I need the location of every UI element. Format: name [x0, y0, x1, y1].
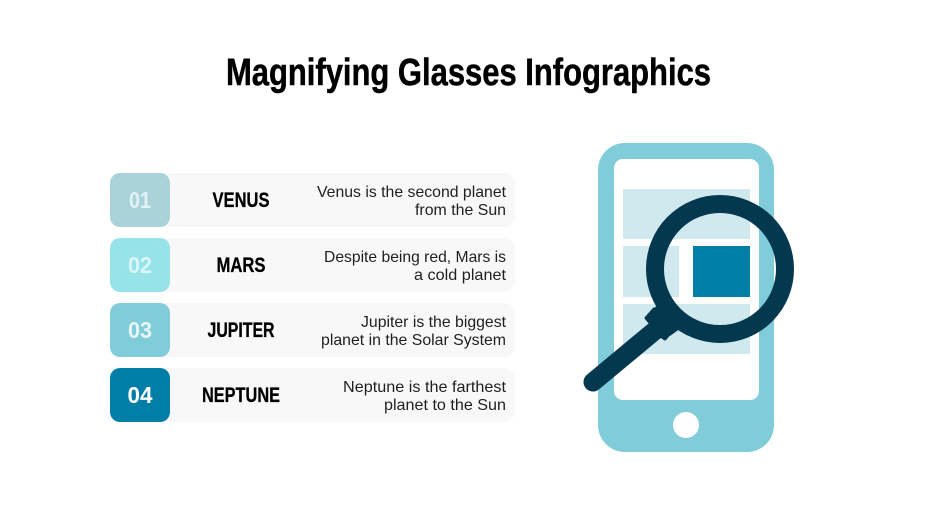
icon: smartphone: [598, 143, 774, 452]
row: Jupiter: Jupiter is the biggest: [361, 314, 507, 331]
row: Mars: 02: [128, 252, 152, 278]
row: Neptune: Neptune is the farthest: [343, 379, 507, 396]
row: Venus: Venus is the second planet: [317, 184, 507, 201]
icon: magnifying glass: [593, 204, 785, 382]
row: Mars: MARS: [216, 254, 266, 277]
row: Neptune: planet to the Sun: [384, 397, 506, 414]
panel: list of planets: [110, 173, 515, 422]
row: Venus: 01: [129, 187, 151, 213]
row: Neptune: [110, 368, 515, 422]
row: Neptune: 04: [128, 382, 153, 408]
row: Mars: [110, 238, 515, 292]
title: Magnifying Glasses Infographics: [226, 52, 711, 94]
row: Jupiter: [110, 303, 515, 357]
row: Jupiter: planet in the Solar System: [321, 332, 506, 349]
row: Venus: [110, 173, 515, 227]
row: Jupiter: JUPITER: [208, 319, 274, 342]
row: Venus: VENUS: [212, 189, 270, 212]
row: Neptune: NEPTUNE: [202, 384, 280, 407]
row: Venus: from the Sun: [415, 202, 506, 219]
row: Mars: a cold planet: [414, 267, 507, 284]
row: Mars: Despite being red, Mars is: [324, 249, 506, 266]
row: Jupiter: 03: [128, 317, 152, 343]
